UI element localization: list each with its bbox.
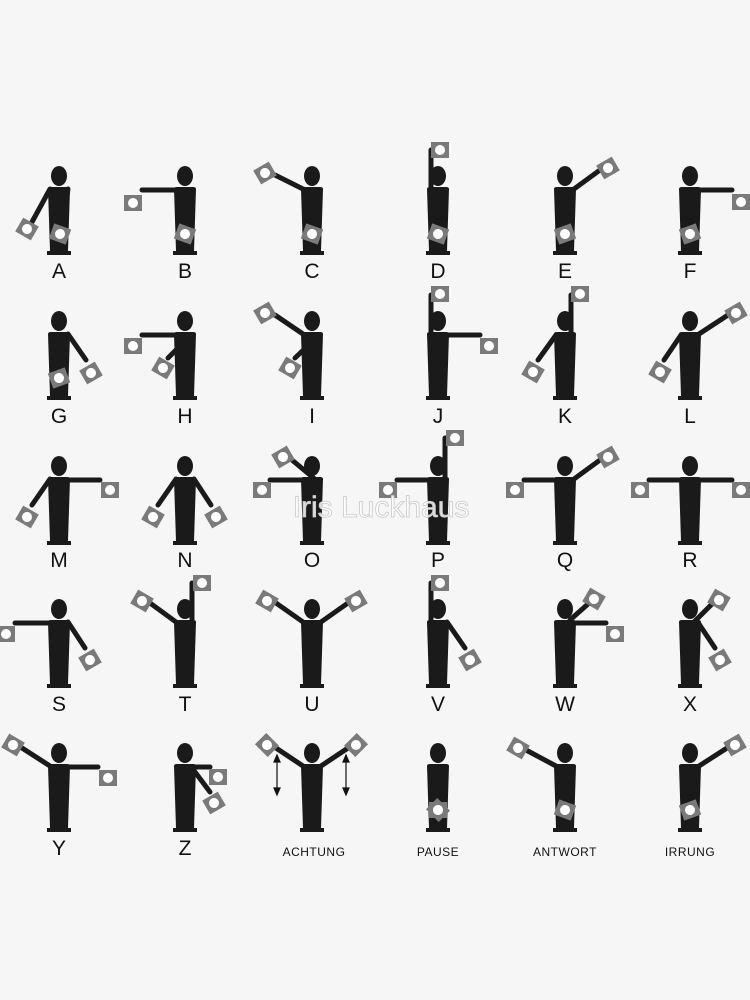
- figure: J: J: [433, 405, 443, 428]
- arrow: left up-down: [274, 755, 349, 795]
- figure: PAUSE: PAUSE: [417, 845, 459, 859]
- figure: Z: [173, 743, 227, 860]
- figure: I: I: [309, 405, 315, 428]
- figure: V: V: [431, 693, 445, 716]
- figure: ANTWORT: ANTWORT: [533, 845, 597, 859]
- figure: F: F: [684, 260, 696, 283]
- figure: T: [130, 575, 211, 716]
- figure: R: [631, 456, 750, 572]
- figure: X: X: [683, 693, 697, 716]
- figure: ACHTUNG: [255, 733, 368, 859]
- figure: O: O: [304, 549, 320, 572]
- figure: D: D: [430, 260, 446, 283]
- figure: ACHTUNG: ACHTUNG: [283, 845, 345, 859]
- figure: T: T: [179, 693, 192, 716]
- figure: U: [255, 590, 368, 716]
- figure: E: [553, 157, 620, 283]
- figure: G: [47, 311, 103, 428]
- figure: U: U: [304, 693, 320, 716]
- figure: H: H: [177, 405, 193, 428]
- figure: V: [426, 575, 482, 716]
- figure: K: K: [558, 405, 572, 428]
- figure: ANTWORT: [506, 737, 597, 859]
- figure: G: G: [51, 405, 67, 428]
- figure: X: [678, 589, 732, 716]
- figure: E: E: [558, 260, 572, 283]
- figure: O: [253, 446, 324, 572]
- figure: S: S: [52, 693, 66, 716]
- figure: I: [253, 302, 324, 428]
- figure: C: C: [304, 260, 320, 283]
- figure: W: [553, 588, 624, 716]
- figure: L: L: [684, 405, 696, 428]
- figure: B: [124, 166, 197, 283]
- figure: H: [124, 311, 197, 428]
- figure: IRRUNG: IRRUNG: [665, 845, 715, 859]
- figure: W: W: [555, 693, 575, 716]
- figure: Y: [1, 734, 117, 860]
- figure: P: [379, 430, 464, 572]
- figure: D: [426, 142, 450, 283]
- watermark: Iris Luckhaus: [293, 491, 469, 524]
- figure: L: [648, 302, 748, 428]
- figure: N: [141, 456, 228, 572]
- figure: A: A: [52, 260, 66, 283]
- figure: M: M: [50, 549, 68, 572]
- figure: K: [521, 286, 589, 428]
- figure: S: [0, 599, 102, 716]
- figure: Q: Q: [557, 549, 573, 572]
- figure: F: [678, 166, 750, 283]
- figure: Y: Y: [52, 837, 66, 860]
- figure: C: [253, 162, 324, 283]
- figure: B: B: [178, 260, 192, 283]
- figure: P: P: [431, 549, 445, 572]
- figure: R: R: [682, 549, 698, 572]
- figure: PAUSE: [417, 743, 459, 859]
- figure: IRRUNG: [665, 734, 747, 859]
- figure: N: N: [177, 549, 193, 572]
- figure: A: [15, 166, 71, 283]
- figure: M: [15, 456, 119, 572]
- figure: Q: [506, 446, 620, 572]
- figure: Z: Z: [179, 837, 192, 860]
- figure: J: [426, 286, 498, 428]
